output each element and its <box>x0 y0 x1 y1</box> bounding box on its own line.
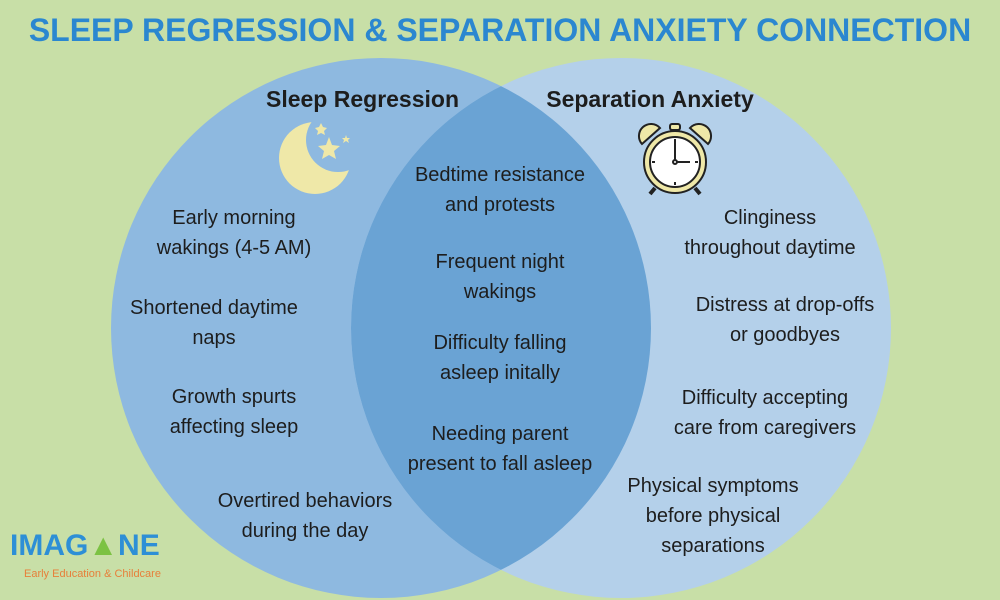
text: present to fall asleep <box>408 453 592 475</box>
text: Overtired behaviors <box>218 490 392 512</box>
right items: Clinginess <box>724 207 816 229</box>
icon: moon and stars <box>279 122 351 194</box>
logo: Early Education & Childcare <box>24 568 161 580</box>
left items <box>156 207 311 259</box>
text: Difficulty falling <box>433 332 567 354</box>
text: separations <box>661 535 765 557</box>
circle: separation anxiety <box>351 58 891 598</box>
text: Shortened daytime <box>130 297 298 319</box>
icon: alarm clock <box>639 124 711 194</box>
left items: wakings (4-5 AM) <box>157 237 311 259</box>
overlap items: Bedtime resistance <box>415 164 585 186</box>
text: Needing parent <box>432 423 568 445</box>
text: asleep initally <box>440 362 560 384</box>
overlap items: and protests <box>445 194 555 216</box>
overlap <box>351 86 651 570</box>
text: or goodbyes <box>730 324 840 346</box>
text: Distress at drop-offs <box>696 294 874 316</box>
text: naps <box>192 327 236 349</box>
text: wakings <box>464 281 536 303</box>
left items: Early morning <box>172 207 296 229</box>
logo: IMAG▲NE <box>10 529 160 562</box>
overlap items <box>415 164 585 216</box>
title: SLEEP REGRESSION & SEPARATION ANXIETY CONNECTION <box>29 12 971 48</box>
right items: throughout daytime <box>684 237 856 259</box>
text: affecting sleep <box>170 416 298 438</box>
text: Frequent night <box>436 251 564 273</box>
text: Physical symptoms <box>627 475 799 497</box>
venn diagram <box>111 58 891 598</box>
heading: sleep regression: Sleep Regression <box>266 86 459 112</box>
text: before physical <box>646 505 780 527</box>
text: Growth spurts <box>172 386 296 408</box>
text: care from caregivers <box>674 417 856 439</box>
circle: sleep regression <box>111 58 651 598</box>
logo <box>10 529 161 580</box>
heading: separation anxiety: Separation Anxiety <box>546 86 754 112</box>
text: during the day <box>242 520 368 542</box>
right items <box>684 207 856 259</box>
text: Difficulty accepting <box>682 387 848 409</box>
